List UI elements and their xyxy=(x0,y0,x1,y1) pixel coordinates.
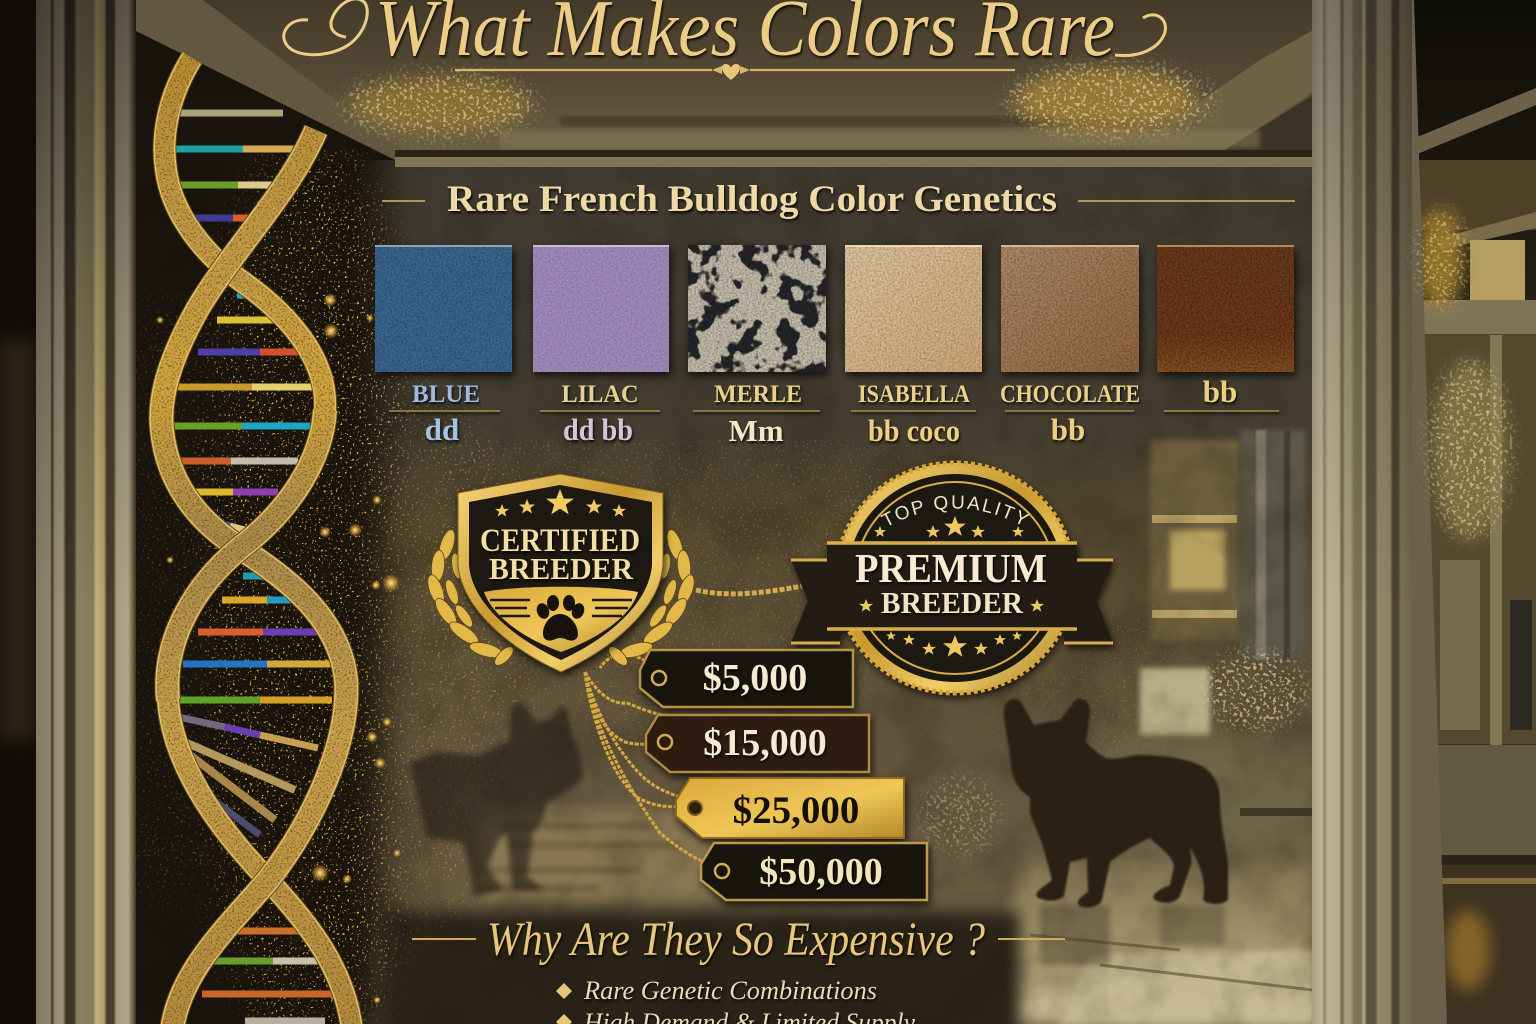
floor left reflections xyxy=(480,810,720,900)
seal text: BREEDER xyxy=(881,585,1024,620)
interior behind badges xyxy=(1150,440,1240,640)
laurel left xyxy=(424,528,516,668)
ceiling xyxy=(130,0,1313,167)
icon: paw xyxy=(535,595,586,641)
label: chocolate bb: CHOCOLATE xyxy=(1000,381,1140,408)
seal text: PREMIUM xyxy=(855,545,1047,591)
price tag: $50,000 xyxy=(701,843,927,900)
seal lower stars xyxy=(859,599,1044,657)
price tag: $25,000: $25,000 xyxy=(733,789,859,832)
right pilaster xyxy=(1312,0,1447,1024)
label: lilac dd bb: dd bb xyxy=(563,412,633,447)
label: chocolate bb xyxy=(1000,381,1140,447)
right room scene xyxy=(1410,0,1536,1024)
shield text: BREEDER xyxy=(489,551,634,586)
heading: why expensive: Why Are They So Expensive ? xyxy=(487,913,985,966)
certified breeder shield xyxy=(458,474,663,672)
price tag: $15,000: $15,000 xyxy=(703,722,827,764)
label: blue dd xyxy=(389,381,500,447)
seal arc text: TOP QUALITY xyxy=(880,495,1030,526)
swatch: isabella xyxy=(845,245,982,372)
label: lilac dd bb: LILAC xyxy=(562,381,638,408)
price tag: $5,000: $5,000 xyxy=(703,657,807,699)
shield text: CERTIFIED xyxy=(480,523,640,559)
left pilaster xyxy=(36,0,136,1024)
laurel right xyxy=(606,528,698,668)
bottom dark zone xyxy=(380,912,1020,1024)
label: bb xyxy=(1164,374,1279,411)
premium breeder seal xyxy=(790,460,1118,703)
swatch: blue xyxy=(375,245,512,372)
dog silhouette: right xyxy=(1004,699,1228,908)
floor xyxy=(990,860,1313,1024)
DNA strand front xyxy=(161,130,346,1024)
label: merle Mm: MERLE xyxy=(714,381,802,408)
label: blue dd: dd xyxy=(425,412,459,447)
label: isabella bb coco: ISABELLA xyxy=(858,381,970,408)
reasons list xyxy=(556,976,915,1024)
label: merle Mm xyxy=(693,381,820,448)
swatch labels xyxy=(389,374,1279,448)
DNA double helix xyxy=(161,58,352,1024)
heading: color genetics: Rare French Bulldog Color Genetics xyxy=(447,179,1057,220)
swatch: chocolate xyxy=(1001,245,1139,372)
swatch: bb brown xyxy=(1157,245,1294,372)
DNA strand back xyxy=(164,58,352,1024)
price tag: $50,000: $50,000 xyxy=(759,851,883,893)
dog silhouette: left xyxy=(410,703,582,897)
laurel wreath xyxy=(424,528,698,668)
price tag: $25,000 xyxy=(676,778,904,838)
seal ribbon tails xyxy=(791,560,1113,643)
label: merle Mm: Mm xyxy=(728,413,784,448)
label: chocolate bb: bb xyxy=(1051,412,1085,447)
price tag: $5,000 xyxy=(640,650,853,707)
seal text xyxy=(855,545,1047,620)
title flourishes xyxy=(284,0,1165,56)
label: isabella bb coco xyxy=(851,381,976,448)
shield text xyxy=(480,523,640,586)
title divider with heart xyxy=(455,64,1015,80)
shield stars xyxy=(495,489,626,517)
seal top stars xyxy=(874,516,1024,538)
seal banner xyxy=(827,542,1077,630)
swatch: lilac xyxy=(533,245,669,372)
left dark area xyxy=(120,100,385,1024)
color swatches xyxy=(375,245,1294,372)
chain: shield to seal xyxy=(696,586,802,594)
price tag: $15,000 xyxy=(646,715,869,772)
center panel xyxy=(135,160,1313,1024)
DNA crossing overlap xyxy=(167,410,325,700)
label: lilac dd bb xyxy=(540,381,660,447)
label: blue dd: BLUE xyxy=(412,381,480,408)
label: isabella bb coco: bb coco xyxy=(868,413,960,448)
swatch: merle xyxy=(688,245,826,372)
reason: rare genetics: Rare Genetic Combinations xyxy=(583,976,877,1005)
DNA rungs xyxy=(172,113,333,1021)
chains xyxy=(585,654,717,867)
label: bb: bb xyxy=(1203,374,1237,409)
